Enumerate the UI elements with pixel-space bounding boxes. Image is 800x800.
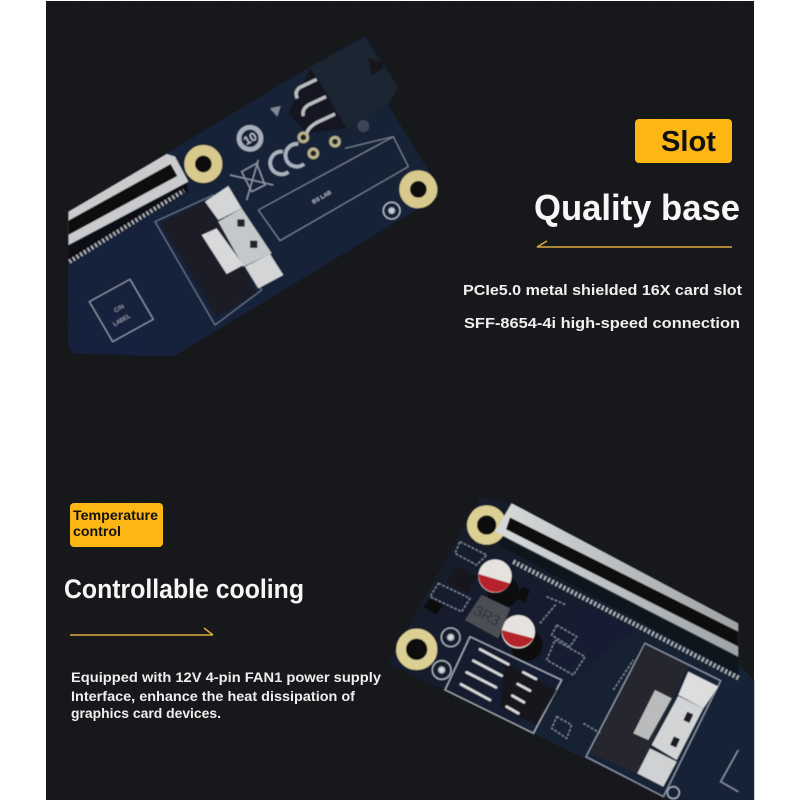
board body <box>68 36 438 357</box>
badge: Slot <box>635 119 732 163</box>
badge: Slot: Slot <box>661 126 716 158</box>
heading: Controllable cooling: Controllable cooling <box>64 574 304 604</box>
text: cooling description <box>71 669 381 721</box>
panel: temperature control text <box>64 503 381 721</box>
waste bin mark <box>230 160 273 200</box>
text: cooling description: graphics card devices. <box>71 705 221 721</box>
test point <box>383 202 400 219</box>
small components <box>430 542 633 738</box>
text: slot features: SFF-8654-4i high-speed connection <box>464 315 740 332</box>
SFF-8654 connector <box>155 186 283 325</box>
inductor 3R3 <box>465 595 510 638</box>
badge: Temperature control: control <box>73 523 121 539</box>
C/N label box: LABEL <box>113 313 132 328</box>
solder pads <box>299 133 339 158</box>
PCIe slot <box>68 154 188 263</box>
CE mark <box>270 144 304 174</box>
board body <box>388 497 754 800</box>
SFF-8654 connector <box>586 643 721 799</box>
recycling icon: 10 <box>241 129 260 148</box>
text: slot features <box>463 282 742 332</box>
side outline <box>721 750 738 792</box>
text: cooling description: Interface, enhance the heat dissipation of <box>71 688 355 704</box>
panel: top circuit board <box>68 36 438 357</box>
FAN1 header <box>445 637 562 733</box>
C/N label box: C/N <box>114 304 125 314</box>
capacitors <box>478 559 543 661</box>
text: cooling description: Equipped with 12V 4-pin FAN1 power supply <box>71 669 381 685</box>
badge: Temperature control: Temperature <box>73 507 158 523</box>
panel: slot text <box>463 119 742 332</box>
heading: Quality base: Quality base <box>534 187 740 228</box>
arrow: right <box>70 628 213 635</box>
PCIe slot <box>495 503 739 678</box>
inductor 3R3: 3R3 <box>471 603 502 630</box>
C/N label box <box>89 279 153 342</box>
badge: Temperature control <box>70 503 163 547</box>
mounting holes <box>190 150 432 203</box>
mounting holes <box>401 510 501 665</box>
test points <box>432 628 460 679</box>
BS LAB text: BS LAB <box>312 190 333 206</box>
text: slot features: PCIe5.0 metal shielded 16X card slot <box>463 282 742 299</box>
silkscreen outline <box>258 137 408 241</box>
fan power connector <box>270 38 398 133</box>
panel: bottom circuit board <box>388 497 754 800</box>
arrow: left <box>537 241 732 247</box>
